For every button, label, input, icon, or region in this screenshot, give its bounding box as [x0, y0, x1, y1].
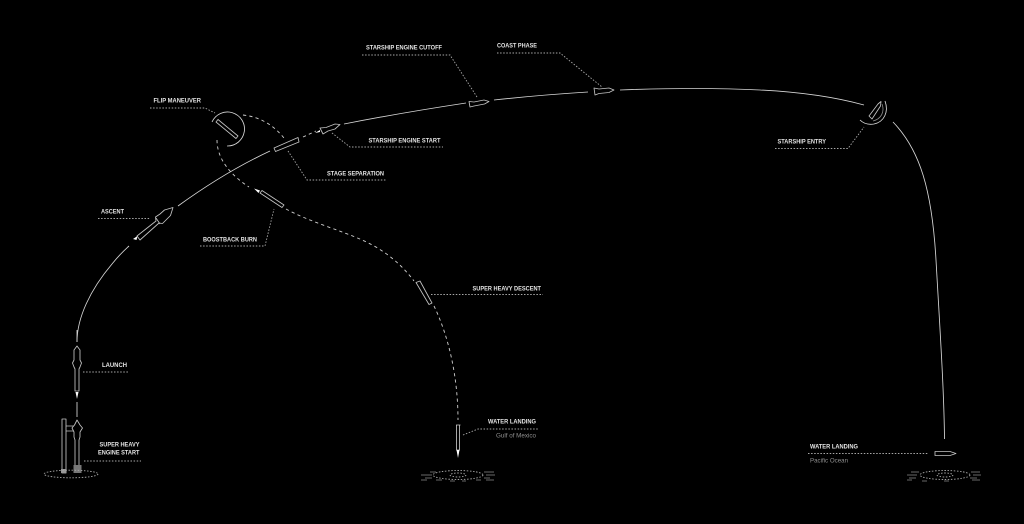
label: water landing, pacific ocean: Pacific Ocean [810, 458, 848, 464]
booster: stage separation [274, 138, 299, 152]
ship: ascent stack [133, 208, 173, 240]
label: boostback burn: BOOSTBACK BURN [203, 236, 257, 244]
label: ascent [98, 208, 150, 218]
launch site pad [44, 470, 98, 478]
label: stage separation: STAGE SEPARATION [327, 170, 384, 178]
label: water landing, pacific ocean [808, 444, 928, 464]
flip maneuver arc [212, 112, 244, 146]
label: starship entry: STARSHIP ENTRY [778, 138, 826, 146]
launch tower with rocket [61, 419, 82, 473]
launch rocket [72, 330, 82, 417]
booster: water landing [456, 425, 460, 458]
label: starship engine start: STARSHIP ENGINE START [368, 138, 441, 144]
label: starship engine cutoff [362, 44, 477, 97]
label: starship engine start [332, 133, 443, 147]
label: water landing, gulf of mexico: WATER LANDING [488, 418, 536, 426]
label: super heavy descent: SUPER HEAVY DESCENT [472, 286, 542, 292]
starship ascent and coast trajectory [77, 88, 944, 439]
label: super heavy engine start: ENGINE START [98, 450, 140, 456]
label: ascent: ASCENT [101, 208, 125, 216]
label: launch [83, 362, 129, 372]
ship: entry with heat arc [860, 101, 886, 124]
label: super heavy engine start [84, 442, 141, 461]
label: coast phase [497, 42, 602, 87]
label: flip maneuver [150, 98, 215, 113]
label: starship entry [775, 127, 864, 148]
booster return trajectory [217, 115, 458, 420]
booster: super heavy descent [416, 281, 432, 304]
water surface: pacific ocean [907, 470, 981, 481]
label: coast phase: COAST PHASE [497, 42, 537, 50]
ship: engine start [315, 124, 340, 134]
label: starship engine cutoff: STARSHIP ENGINE CUTOFF [366, 44, 442, 52]
label: launch: LAUNCH [102, 362, 127, 369]
water surface: gulf of mexico [421, 470, 495, 481]
label: flip maneuver: FLIP MANEUVER [154, 98, 201, 104]
label: water landing, gulf of mexico: Gulf of Mexico [496, 432, 536, 440]
booster: flip maneuver [216, 120, 238, 138]
label: super heavy descent [431, 286, 543, 294]
booster: boostback burn [254, 188, 284, 208]
label: super heavy engine start: SUPER HEAVY [100, 442, 140, 448]
label: water landing, pacific ocean: WATER LANDING [810, 444, 858, 450]
label: boostback burn [200, 209, 274, 246]
ship: coast phase [594, 88, 614, 95]
ship: water landing [935, 452, 956, 456]
label: stage separation [288, 151, 387, 180]
label: water landing, gulf of mexico [463, 418, 539, 440]
ship: engine cutoff [469, 100, 489, 107]
